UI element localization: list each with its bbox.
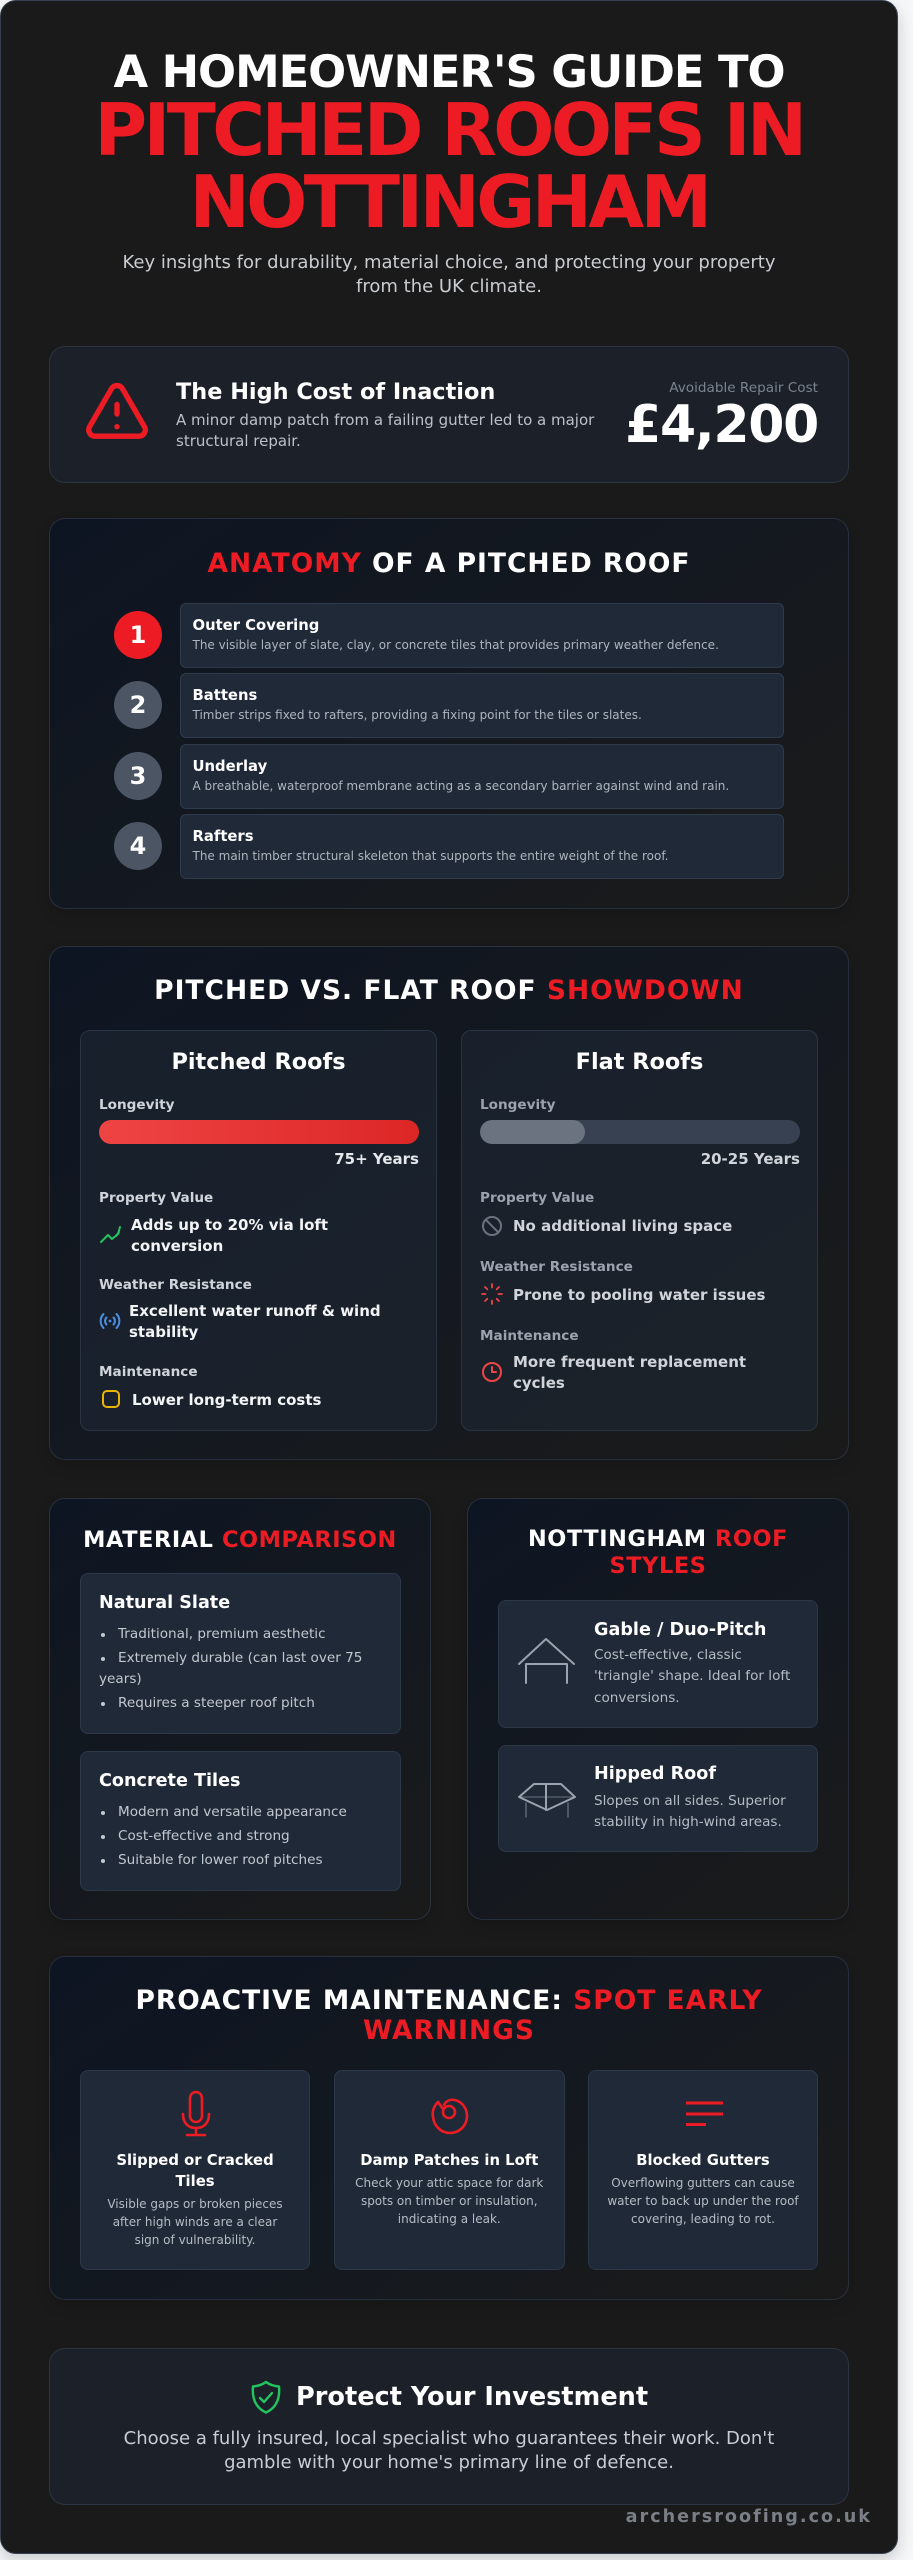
longevity bar fill <box>480 1120 585 1144</box>
layer card 1 <box>180 603 784 668</box>
panel: material comparison <box>49 1498 431 1920</box>
icon: signal waves <box>100 1313 120 1329</box>
bullet 2 <box>99 1650 362 1687</box>
style description: conversions. <box>594 1690 680 1706</box>
text: excellent water runoff: Excellent water runoff & wind <box>129 1302 381 1320</box>
layer description: Timber strips fixed to rafters, providing a fixing point for the tiles or slates. <box>192 708 642 722</box>
card: slipped tiles <box>80 2070 310 2270</box>
warning description <box>607 2176 799 2226</box>
card: flat roofs <box>461 1030 818 1431</box>
text: prone to pooling: Prone to pooling water issues <box>513 1286 765 1304</box>
warning description: indicating a leak. <box>398 2212 501 2226</box>
subtitle <box>123 252 775 297</box>
label: weather resistance: Weather Resistance <box>480 1259 633 1275</box>
layer 4: rafters <box>114 814 784 879</box>
heading: showdown: PITCHED VS. FLAT ROOF SHOWDOWN <box>154 975 744 1006</box>
text: more frequent replacement: cycles <box>513 1374 565 1392</box>
material bullet list <box>99 1626 362 1711</box>
card title: Pitched Roofs <box>171 1049 346 1075</box>
text: adds up to 20%: conversion <box>131 1237 223 1255</box>
icon: damp patch <box>431 2098 468 2134</box>
warning title: Tiles <box>175 2173 215 2190</box>
heading: roof styles: STYLES <box>610 1553 706 1579</box>
text: no additional living space: No additional living space <box>513 1217 732 1235</box>
layer description: A breathable, waterproof membrane acting as a secondary barrier against wind and rain. <box>192 779 729 793</box>
warning title: Slipped or Cracked <box>116 2152 274 2169</box>
label: maintenance: Maintenance <box>99 1364 198 1380</box>
bullet 3: Suitable for lower roof pitches <box>118 1852 323 1868</box>
text: adds up to 20% <box>131 1216 328 1255</box>
card: damp patches <box>334 2070 564 2270</box>
text: more frequent replacement: More frequent replacement <box>513 1353 746 1371</box>
text: more frequent replacement <box>513 1353 746 1392</box>
number badge 3 <box>114 752 162 800</box>
style title: Gable / Duo-Pitch <box>594 1620 766 1640</box>
bullet 3: Requires a steeper roof pitch <box>118 1695 315 1711</box>
title: PITCHED ROOFS IN <box>94 88 804 172</box>
layer 1: outer covering <box>114 603 784 668</box>
layer name: Outer Covering <box>192 617 319 634</box>
longevity bar <box>99 1120 419 1144</box>
panel: high cost of inaction <box>49 346 849 483</box>
card: hipped roof <box>498 1745 818 1852</box>
warning title: Damp Patches in Loft <box>360 2152 538 2169</box>
style description <box>594 1793 786 1830</box>
style description: 'triangle' shape. Ideal for loft <box>594 1668 790 1684</box>
card title: Flat Roofs <box>576 1049 703 1075</box>
card: natural slate <box>80 1573 401 1734</box>
icon: shield check <box>249 2380 283 2414</box>
icon: ban <box>482 1216 502 1236</box>
bullet 1: Modern and versatile appearance <box>118 1804 347 1820</box>
number badge 3: 3 <box>130 762 146 790</box>
material bullet list <box>101 1804 347 1868</box>
warning description: after high winds are a clear <box>113 2215 277 2229</box>
value: 75+ years: 75+ Years <box>334 1150 419 1168</box>
longevity bar track <box>480 1120 800 1144</box>
label: maintenance: Maintenance <box>480 1328 579 1344</box>
warning description <box>107 2197 283 2247</box>
card: pitched roofs <box>80 1030 437 1431</box>
warning title: Blocked Gutters <box>636 2152 770 2169</box>
warning description: Visible gaps or broken pieces <box>107 2197 283 2211</box>
text: damp patch description <box>176 411 594 450</box>
warning description: covering, leading to rot. <box>631 2212 775 2226</box>
warning description: water to back up under the roof <box>607 2194 799 2208</box>
card: concrete tiles <box>80 1751 401 1891</box>
icon: rounded square <box>102 1390 120 1408</box>
number badge 1: 1 <box>130 621 146 649</box>
warning description <box>355 2176 544 2226</box>
card: gable roof <box>498 1600 818 1728</box>
style description: Cost-effective, classic <box>594 1647 742 1663</box>
text: call to action <box>50 2427 848 2475</box>
warning description: Overflowing gutters can cause <box>611 2176 795 2190</box>
panel: proactive maintenance <box>49 1956 849 2300</box>
label: property value: Property Value <box>99 1190 213 1206</box>
heading: protect your investment: Protect Your Investment <box>296 2382 648 2412</box>
style description <box>594 1647 790 1706</box>
number badge 4: 4 <box>130 832 146 860</box>
text: excellent water runoff <box>129 1302 381 1341</box>
icon: hipped roof <box>518 1783 576 1818</box>
layer name: Underlay <box>192 758 267 775</box>
bullet 2: Extremely durable (can last over 75 <box>118 1650 362 1666</box>
layer card 4 <box>180 814 784 879</box>
layer card 2 <box>180 673 784 738</box>
text: call to action: Choose a fully insured, local specialist who guarantees their work. Don't <box>124 2428 774 2449</box>
icon: gable roof <box>518 1638 575 1684</box>
style title: Hipped Roof <box>594 1764 716 1784</box>
layer name: Battens <box>192 687 257 704</box>
layer 3: underlay <box>114 744 784 809</box>
panel: nottingham roof styles <box>467 1498 849 1920</box>
number badge 1 <box>114 611 162 659</box>
heading: proactive maintenance: WARNINGS <box>363 2015 535 2046</box>
heading: proactive maintenance: PROACTIVE MAINTENANCE: SPOT EARLY <box>135 1985 763 2016</box>
number badge 2 <box>114 681 162 729</box>
icon: gutter lines <box>686 2102 723 2126</box>
label: weather resistance: Weather Resistance <box>99 1277 252 1293</box>
layer card 3 <box>180 744 784 809</box>
heading: material comparison: MATERIAL COMPARISON <box>83 1527 397 1553</box>
warning description: Check your attic space for dark <box>355 2176 543 2190</box>
heading: anatomy: ANATOMY OF A PITCHED ROOF <box>207 548 690 579</box>
label: property value: Property Value <box>480 1190 594 1206</box>
style description: Slopes on all sides. Superior <box>594 1793 786 1809</box>
text: adds up to 20%: Adds up to 20% via loft <box>131 1216 328 1234</box>
panel: protect your investment <box>49 2348 849 2505</box>
warning description: spots on timber or insulation, <box>361 2194 538 2208</box>
stat: 4,200 pounds: £4,200 <box>625 395 818 455</box>
number badge 2: 2 <box>130 691 146 719</box>
layer 2: battens <box>114 673 784 738</box>
heading: proactive maintenance <box>135 1985 763 2046</box>
title: NOTTINGHAM <box>189 160 709 244</box>
heading: roof styles <box>528 1526 788 1579</box>
number badge 4 <box>114 822 162 870</box>
label: avoidable repair cost: Avoidable Repair Cost <box>669 380 818 396</box>
layer name: Rafters <box>192 828 254 845</box>
layer description: The visible layer of slate, clay, or concrete tiles that provides primary weather defence. <box>192 638 719 652</box>
icon: clock <box>482 1362 502 1382</box>
heading: roof styles: NOTTINGHAM ROOF <box>528 1526 788 1552</box>
subtitle: Key insights for durability, material choice, and protecting your property <box>123 252 775 273</box>
footer: website: archersroofing.co.uk <box>626 2507 872 2527</box>
heading: high cost: The High Cost of Inaction <box>176 379 495 405</box>
panel: anatomy of a pitched roof <box>49 518 849 909</box>
bullet 1: Traditional, premium aesthetic <box>118 1626 326 1642</box>
warning description: sign of vulnerability. <box>135 2233 255 2247</box>
bullet 2: years) <box>99 1671 142 1687</box>
material title: Concrete Tiles <box>99 1771 240 1791</box>
icon: spinner <box>481 1283 503 1305</box>
text: damp patch description: structural repair. <box>176 432 301 450</box>
panel: pitched vs flat showdown <box>49 946 849 1460</box>
icon: microphone <box>182 2090 210 2136</box>
layer description: The main timber structural skeleton that supports the entire weight of the roof. <box>192 849 668 863</box>
bullet 2: Cost-effective and strong <box>118 1828 290 1844</box>
material title: Natural Slate <box>99 1593 230 1613</box>
text: call to action: gamble with your home's primary line of defence. <box>224 2452 674 2473</box>
card: blocked gutters <box>588 2070 818 2270</box>
warning title <box>116 2152 274 2190</box>
style description: stability in high-wind areas. <box>594 1814 782 1830</box>
title <box>94 45 804 244</box>
text: damp patch description: A minor damp patch from a failing gutter led to a major <box>176 411 594 429</box>
icon: trending up <box>100 1226 121 1243</box>
text: excellent water runoff: stability <box>129 1323 198 1341</box>
title: A HOMEOWNER'S GUIDE TO <box>114 45 784 98</box>
text: lower long-term costs: Lower long-term costs <box>132 1391 321 1409</box>
value: 20-25 years: 20-25 Years <box>701 1150 800 1168</box>
label: longevity: Longevity <box>480 1097 556 1113</box>
subtitle: from the UK climate. <box>356 276 542 297</box>
icon: warning triangle <box>86 382 148 439</box>
label: longevity: Longevity <box>99 1097 175 1113</box>
